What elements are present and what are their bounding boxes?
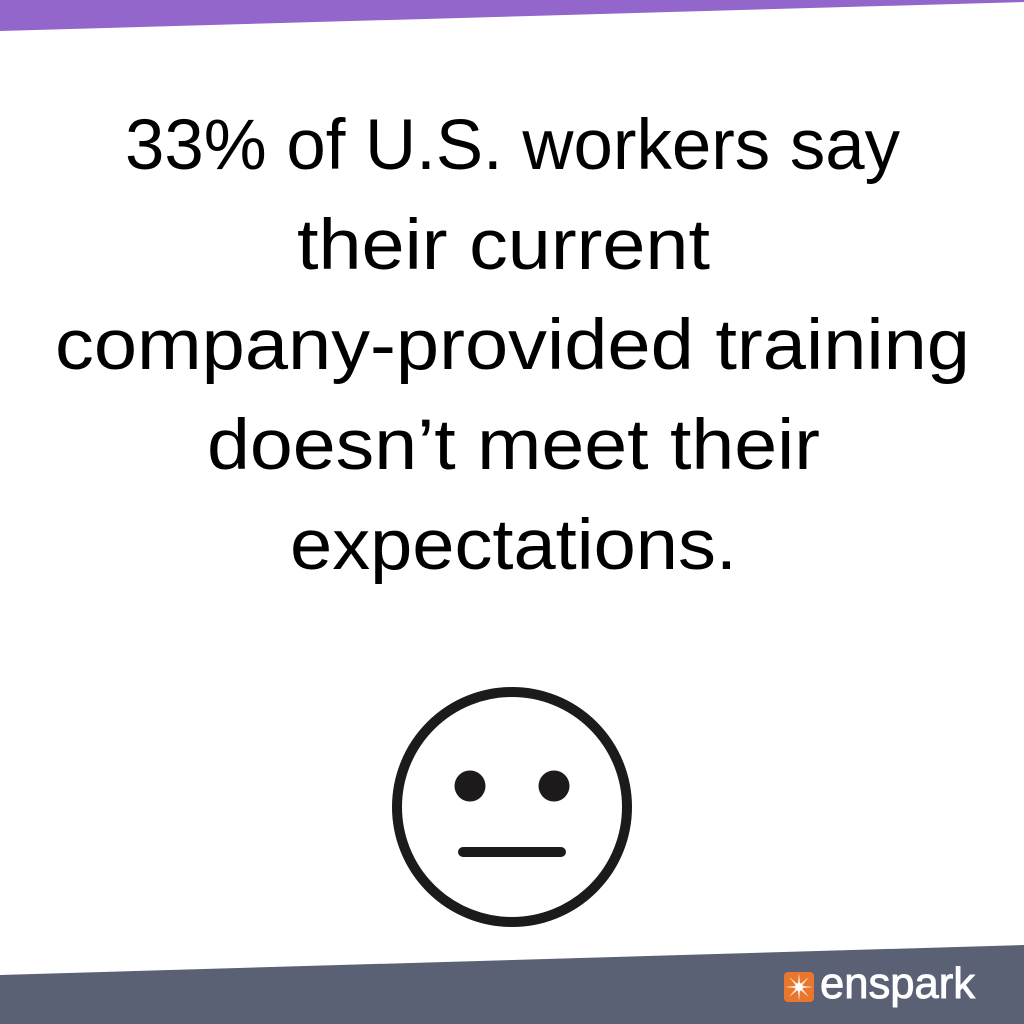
heading: statistic statement: expectations.: [290, 506, 737, 585]
heading: statistic statement: doesn’t meet their: [207, 406, 820, 485]
heading: statistic statement: [55, 106, 970, 585]
logo wordmark: enspark: [820, 959, 976, 1008]
heading: statistic statement: company-provided training: [55, 306, 970, 385]
bottom slate band: [0, 945, 1024, 1024]
top purple band: [0, 0, 1024, 31]
icon: neutral face: [397, 692, 627, 922]
icon: orange spark square: [784, 972, 814, 1002]
heading: statistic statement: 33% of U.S. workers say: [125, 106, 900, 185]
heading: statistic statement: their current: [297, 206, 710, 285]
logo: enspark: [784, 959, 976, 1008]
